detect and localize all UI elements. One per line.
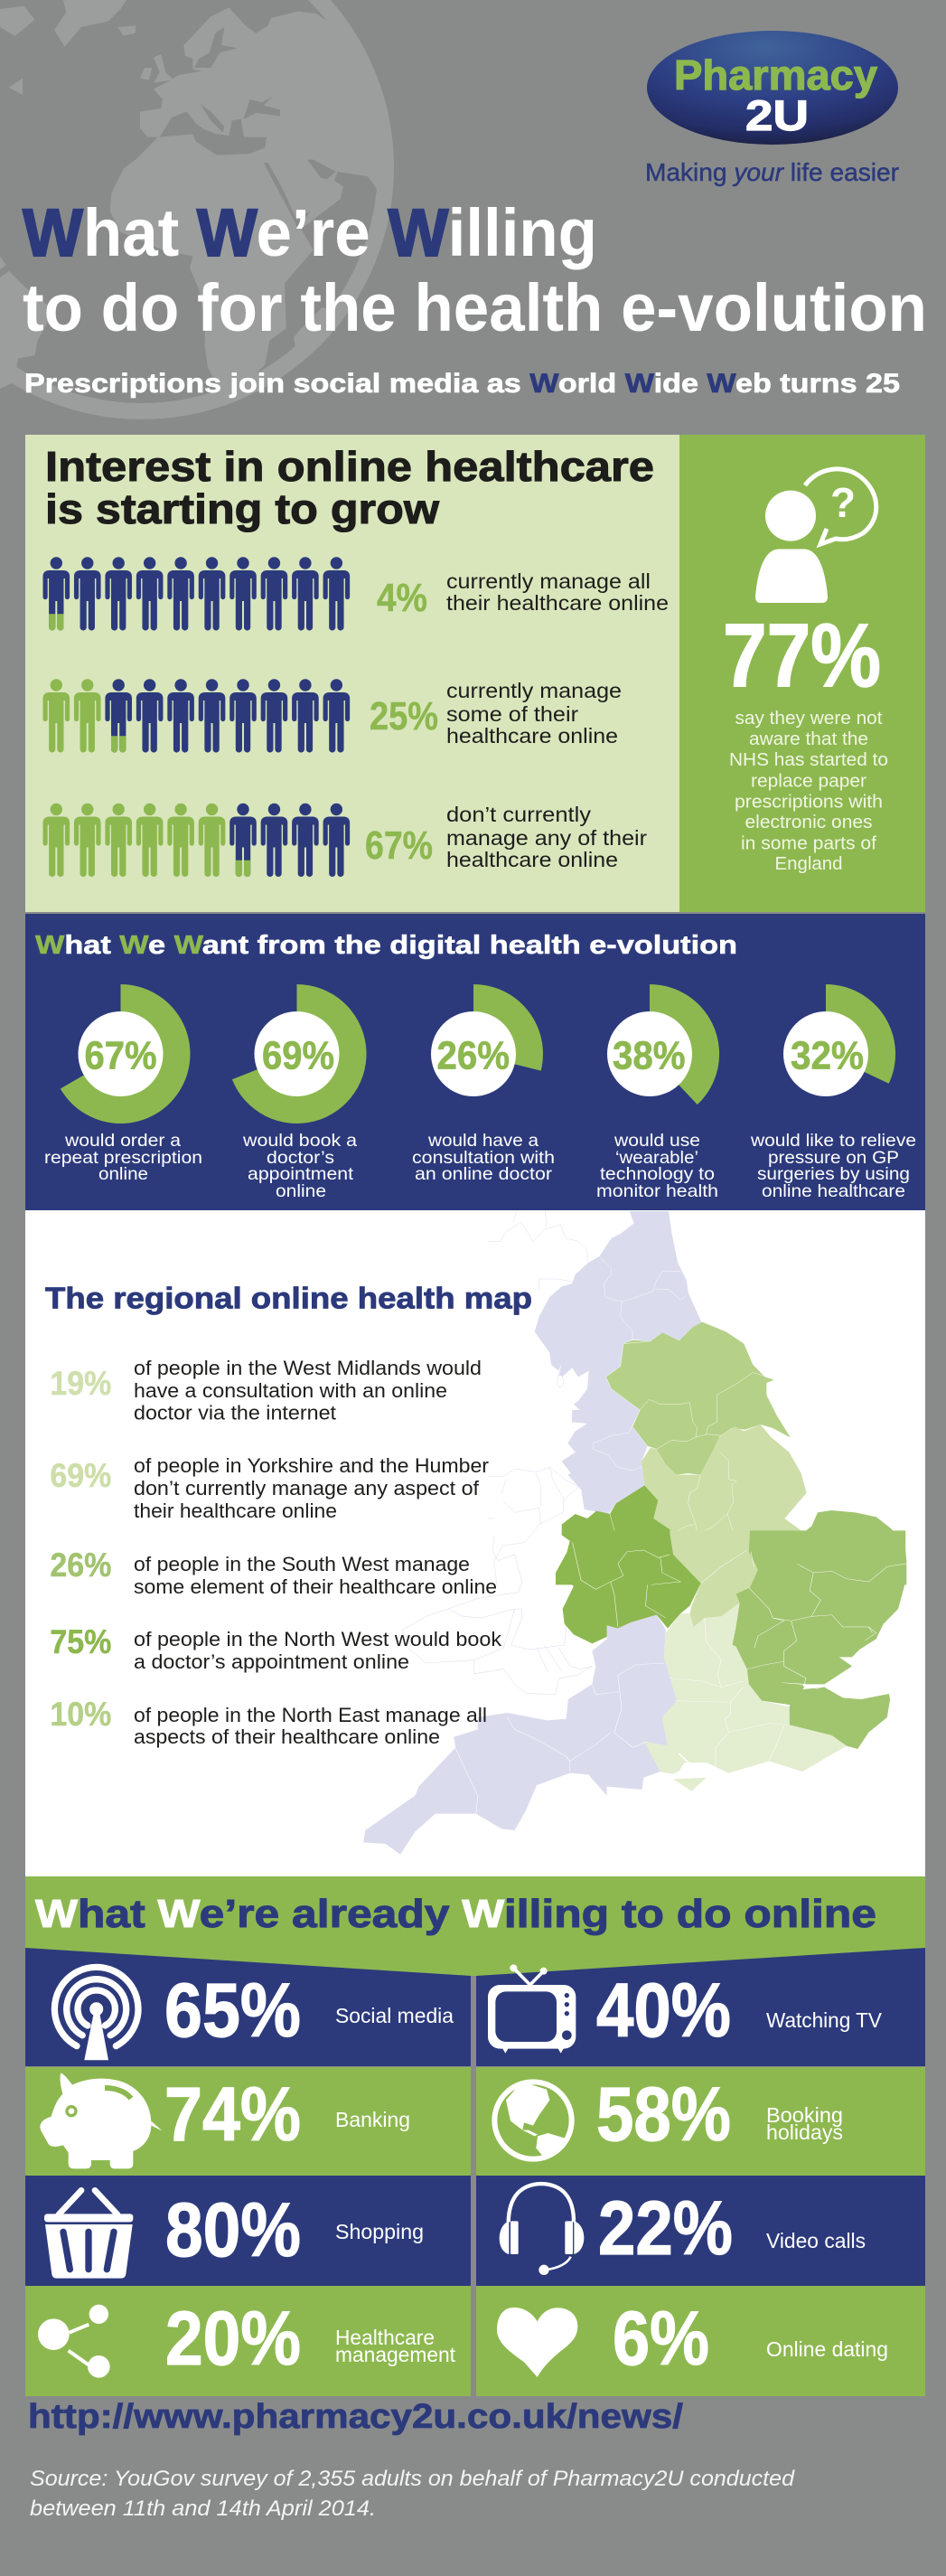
donut: 26% online doctor <box>412 984 555 1184</box>
tile: shopping <box>25 2176 471 2286</box>
icon: broadcast tower <box>54 1967 138 2060</box>
globe background <box>0 0 394 419</box>
donut: 38% wearable technology: monitor health <box>596 1181 718 1201</box>
text: not aware description: England <box>775 854 842 874</box>
tile: online dating: Online dating <box>766 2337 888 2361</box>
tile: healthcare management: Healthcare <box>335 2326 435 2349</box>
donut: 67% repeat prescription <box>44 984 202 1184</box>
donut: 32% relieve GP pressure: online healthcare <box>762 1181 905 1201</box>
stat: 19% West Midlands: have a consultation with an online <box>134 1379 447 1402</box>
tile: watching TV <box>476 1948 925 2066</box>
text: not aware description: aware that the <box>749 729 868 749</box>
icon: person with question bubble: ? <box>830 479 856 526</box>
stat: 25% currently manage some: 25% <box>370 694 438 738</box>
tile: healthcare management: management <box>335 2343 456 2366</box>
donut: 26% online doctor: an online doctor <box>415 1164 553 1184</box>
logo <box>645 31 899 186</box>
icon: television <box>488 1964 576 2054</box>
stat: 26% South West: some element of their healthcare online <box>134 1575 497 1598</box>
tile: watching TV: 40% <box>596 1968 731 2053</box>
tile: healthcare management <box>25 2286 471 2396</box>
stat: 19% West Midlands: of people in the West Midlands would <box>134 1357 482 1379</box>
icon: earth globe <box>494 2082 572 2159</box>
stat: 67% don't currently manage: 67% <box>365 823 433 868</box>
tile: watching TV: Watching TV <box>766 2008 883 2032</box>
icon: shopping basket <box>44 2190 133 2279</box>
stat: 19% West Midlands: 19% <box>50 1365 111 1402</box>
stat: 77%: 77% <box>723 605 881 705</box>
stat: 26% South West: 26% <box>50 1547 111 1584</box>
heading: interest in online healthcare <box>45 443 654 532</box>
tile: social media: 65% <box>164 1968 301 2053</box>
source note: Source: YouGov survey of 2,355 adults on behalf of Pharmacy2U conducted <box>30 2467 795 2491</box>
donut: 32% relieve GP pressure: would like to relieve <box>750 1131 916 1151</box>
text: not aware description: prescriptions with <box>735 792 883 812</box>
donut: 38% wearable technology: technology to <box>600 1164 715 1184</box>
logo: 2U <box>745 91 809 139</box>
stat: 75% North West: of people in the North West would book <box>134 1628 502 1650</box>
text: not aware description: replace paper <box>751 772 866 792</box>
stat: 69% Yorkshire and the Humber <box>50 1454 489 1522</box>
pictogram row: 67% <box>43 804 350 877</box>
stat: 25% currently manage some: currently manage <box>446 679 622 702</box>
panel: what we want <box>25 914 925 1210</box>
donut: 67% repeat prescription: online <box>98 1164 148 1184</box>
tile: shopping: Shopping <box>335 2220 424 2243</box>
tile: booking holidays <box>476 2067 925 2176</box>
donut: 67% repeat prescription: 67% <box>85 1034 157 1078</box>
donut: 69% doctor's appointment: appointment <box>248 1164 354 1184</box>
icon: share nodes <box>38 2305 110 2378</box>
donut: 32% relieve GP pressure: 32% <box>791 1034 864 1078</box>
heading: regional online health map: The regional online health map <box>45 1282 532 1315</box>
title <box>23 195 927 345</box>
panel: already willing to do online <box>25 1876 925 2396</box>
stat: 25% currently manage some: some of their <box>446 702 578 726</box>
title: to do for the health e-volution <box>23 270 927 345</box>
logo: Pharmacy <box>674 52 877 99</box>
stat: 67% don't currently manage: manage any of their <box>446 826 647 850</box>
donut: 69% doctor's appointment <box>232 984 367 1201</box>
map of england and wales <box>363 1211 906 1855</box>
tile: booking holidays: Booking <box>766 2103 843 2127</box>
stat: 26% South West: of people in the South West manage <box>134 1553 470 1575</box>
stat: 67% don't currently manage: don’t currently <box>446 803 592 826</box>
stat: 67% don't currently manage <box>365 803 647 871</box>
heading: what we want: What We Want from the digital health e-volution <box>35 931 737 960</box>
tile: healthcare management: 20% <box>165 2296 301 2381</box>
tile: banking: Banking <box>335 2108 410 2131</box>
stat: 19% West Midlands: doctor via the internet <box>134 1402 336 1424</box>
tile: booking holidays: 58% <box>596 2072 731 2157</box>
logo: Making your life easier <box>645 158 899 186</box>
donut: 67% repeat prescription: repeat prescription <box>44 1148 202 1168</box>
stat: 25% currently manage some: healthcare online <box>446 724 618 747</box>
donut: 38% wearable technology: ‘wearable’ <box>615 1148 698 1168</box>
donut: 69% doctor's appointment: doctor’s <box>267 1148 334 1168</box>
stat: 4% currently manage all <box>377 569 669 620</box>
stat: 75% North West: 75% <box>50 1623 111 1660</box>
stat: 19% West Midlands <box>50 1357 482 1424</box>
icon: piggy bank <box>40 2073 162 2168</box>
stat: 69% Yorkshire and the Humber: their healthcare online <box>134 1500 337 1522</box>
panel: regional online health map <box>25 1210 925 1876</box>
stat: 69% Yorkshire and the Humber: 69% <box>50 1457 111 1494</box>
icon: heart <box>497 2308 577 2377</box>
tile: social media: Social media <box>335 2004 454 2027</box>
tile: online dating <box>476 2286 925 2396</box>
stat: 10% North East: aspects of their healthcare online <box>134 1725 440 1748</box>
donut: 69% doctor's appointment: 69% <box>262 1034 334 1078</box>
stat: 26% South West <box>50 1547 497 1598</box>
donut: 67% repeat prescription: would order a <box>64 1131 181 1151</box>
stat: 75% North West <box>50 1623 502 1673</box>
donut: 69% doctor's appointment: online <box>276 1181 326 1201</box>
donut: 38% wearable technology: 38% <box>613 1034 685 1078</box>
tile: online dating: 6% <box>613 2296 709 2381</box>
donut: 32% relieve GP pressure <box>750 984 916 1201</box>
donut: 26% online doctor: 26% <box>437 1034 510 1078</box>
panel: 77% not aware <box>679 435 925 912</box>
stat: 4% currently manage all: 4% <box>377 576 427 620</box>
heading: interest in online healthcare: Interest in online healthcare <box>45 443 654 490</box>
stat: 10% North East: 10% <box>50 1696 111 1733</box>
tile: banking <box>25 2067 471 2176</box>
donut: 38% wearable technology: would use <box>613 1131 700 1151</box>
tile: video calls: Video calls <box>766 2229 866 2252</box>
stat: 69% Yorkshire and the Humber: of people in Yorkshire and the Humber <box>134 1454 489 1477</box>
title: What We’re Willing <box>23 195 597 270</box>
pictogram row: 25% <box>43 679 350 753</box>
stat: 10% North East <box>50 1696 487 1748</box>
tile: social media <box>25 1948 471 2066</box>
donut: 32% relieve GP pressure: pressure on GP <box>768 1148 899 1168</box>
heading: interest in online healthcare: is starting to grow <box>45 485 439 532</box>
stat: 4% currently manage all: currently manage all <box>446 569 651 593</box>
panel: interest in online healthcare <box>25 435 679 912</box>
text: not aware description: electronic ones <box>745 813 873 832</box>
icon: person with question bubble <box>755 469 876 603</box>
stat: 4% currently manage all: their healthcare online <box>446 591 669 615</box>
text: not aware description: say they were not <box>735 709 883 729</box>
donut: 69% doctor's appointment: would book a <box>242 1131 357 1151</box>
heading: already willing: What We’re already Willing to do online <box>35 1892 876 1936</box>
donut: 26% online doctor: would have a <box>427 1131 539 1151</box>
stat: 25% currently manage some <box>370 679 622 747</box>
tile: booking holidays: holidays <box>766 2120 843 2144</box>
tile: banking: 74% <box>164 2072 301 2157</box>
tile: video calls: 22% <box>598 2186 733 2270</box>
link: pharmacy2u news url: http://www.pharmacy2u.co.uk/news/ <box>28 2398 683 2436</box>
stat: 75% North West: a doctor’s appointment online <box>134 1650 409 1673</box>
text: not aware description <box>729 709 888 874</box>
text: not aware description: NHS has started to <box>729 750 888 770</box>
source note <box>30 2467 795 2521</box>
donut: 38% wearable technology <box>596 984 719 1201</box>
stat: 69% Yorkshire and the Humber: don’t currently manage any aspect of <box>134 1477 480 1500</box>
stat: 10% North East: of people in the North East manage all <box>134 1704 487 1726</box>
tile: shopping: 80% <box>165 2187 301 2272</box>
subtitle: Prescriptions join social media as World Wide Web turns 25 <box>24 369 900 399</box>
stat: 67% don't currently manage: healthcare online <box>446 848 618 871</box>
source note: between 11th and 14th April 2014. <box>30 2496 376 2521</box>
icon: headset <box>500 2184 584 2275</box>
donut: 26% online doctor: consultation with <box>412 1148 555 1168</box>
tile: video calls <box>476 2176 925 2286</box>
donut: 32% relieve GP pressure: surgeries by using <box>757 1164 910 1184</box>
pictogram row: 4% <box>43 557 350 631</box>
text: not aware description: in some parts of <box>741 833 876 853</box>
